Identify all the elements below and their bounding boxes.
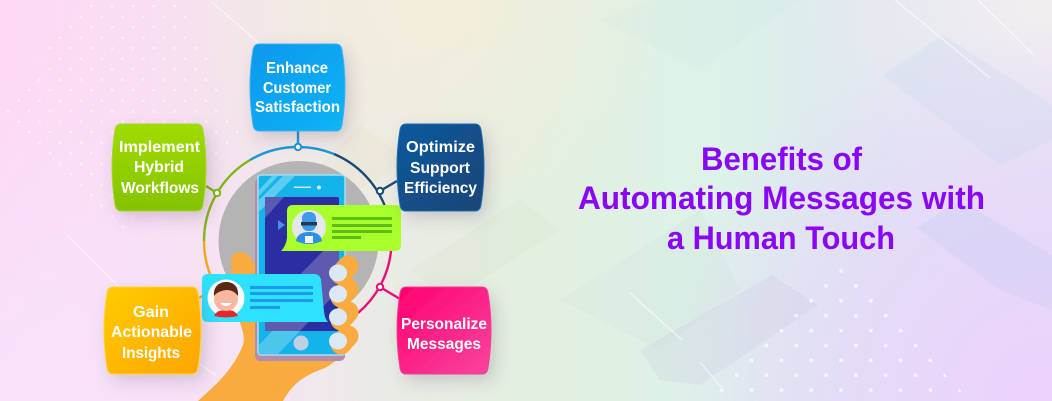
connector: personalize: [377, 284, 400, 299]
connector: gain: [199, 294, 206, 298]
panel: personalize messages: Personalize: [401, 316, 487, 333]
panel: gain actionable insights: [104, 287, 201, 374]
panel: implement hybrid workflows: Workflows: [121, 180, 199, 197]
hand palm and thumb: [198, 252, 345, 401]
panel: implement hybrid workflows: Hybrid: [134, 159, 184, 176]
title: Benefits of: [701, 141, 862, 177]
panel: optimize support efficiency: Efficiency: [404, 180, 477, 197]
fingers: [329, 264, 348, 350]
title: [578, 141, 985, 256]
phone: [255, 175, 345, 361]
panel: enhance customer satisfaction: Satisfaction: [255, 99, 340, 116]
circular diagram ring: [204, 147, 391, 313]
panel: enhance customer satisfaction: Customer: [263, 80, 331, 97]
icon: robot avatar: [292, 210, 326, 244]
icon: person avatar: [208, 280, 244, 318]
panel: gain actionable insights: Insights: [122, 345, 180, 362]
panel: enhance customer satisfaction: Enhance: [266, 60, 328, 77]
panel: gain actionable insights: Actionable: [111, 324, 192, 341]
chat bubble: person: [202, 274, 328, 322]
title: Automating Messages with: [578, 180, 985, 216]
panel: enhance customer satisfaction: [250, 44, 345, 131]
panel: personalize messages: [397, 287, 491, 374]
panel: optimize support efficiency: Support: [410, 160, 470, 177]
panel: optimize support efficiency: Optimize: [406, 139, 475, 156]
play icon: [278, 220, 285, 230]
title: a Human Touch: [667, 220, 895, 256]
connector: implement: [206, 186, 220, 196]
grey circle backdrop: [218, 161, 378, 321]
chat bubble: robot: [281, 205, 401, 251]
panel: optimize support efficiency: [397, 124, 484, 211]
panel: implement hybrid workflows: [112, 124, 206, 211]
home button: [294, 336, 308, 350]
panel: implement hybrid workflows: Implement: [119, 139, 200, 156]
panel: gain actionable insights: Gain: [133, 304, 169, 321]
connector: optimize: [377, 181, 397, 194]
panel: personalize messages: Messages: [407, 336, 481, 353]
connector: enhance: [295, 131, 301, 150]
